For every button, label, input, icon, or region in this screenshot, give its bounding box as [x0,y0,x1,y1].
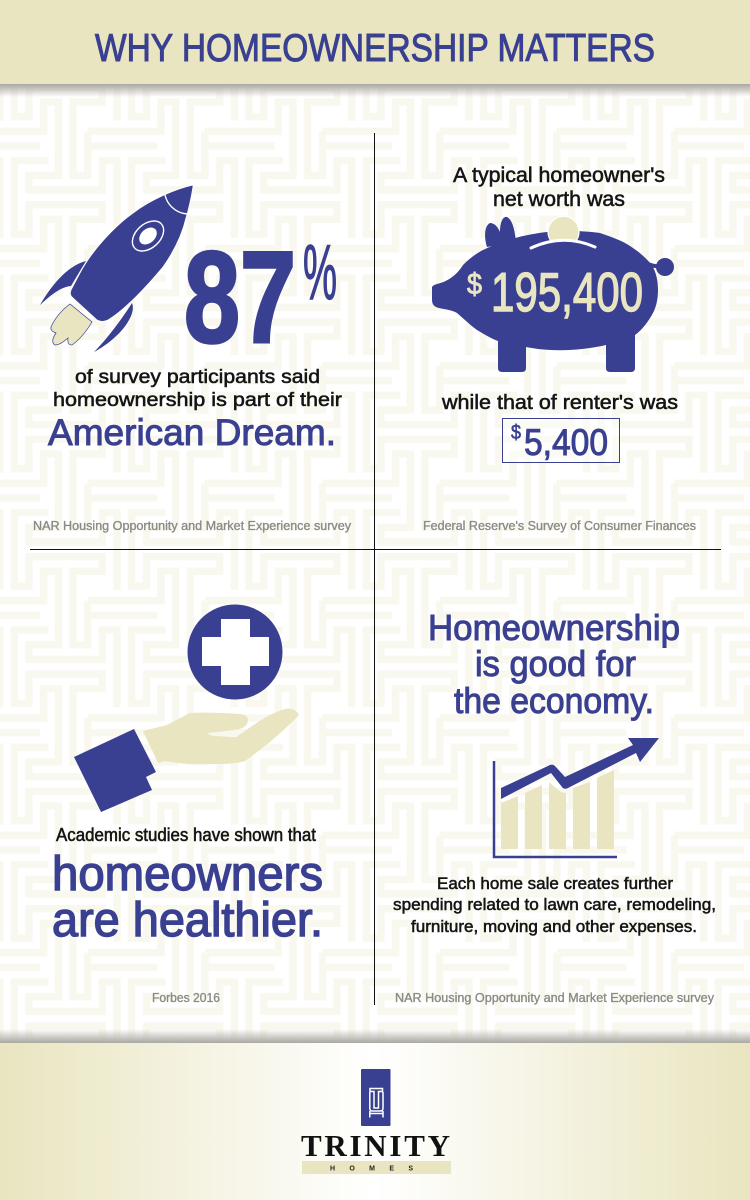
net worth intro: net worth was [493,188,625,211]
spending text: spending related to lawn care, remodeling, [393,895,716,914]
icon: medical cross above hand [74,604,299,812]
panel: healthier [52,604,323,1005]
healthier heading [52,848,323,947]
source: Forbes 2016 [152,991,220,1005]
net worth intro: A typical homeowner's [453,164,665,187]
economy heading: Homeownership [428,607,680,648]
panel: American Dream statistic [33,185,352,533]
economy heading: the economy. [454,680,654,721]
big number 87 percent: 87 [184,224,296,370]
chart: rising bars and arrow [494,738,659,857]
homeowner amount [467,261,643,323]
icon: piggy bank [432,216,674,372]
title: WHY HOMEOWNERSHIP MATTERS [95,27,655,70]
panel: economy [393,607,716,1005]
economy heading [428,607,680,721]
studies text: Academic studies have shown that [56,825,316,845]
icon: rocket [40,185,193,352]
economy heading: is good for [475,643,636,684]
source: NAR Housing Opportunity and Market Experience survey [395,991,715,1005]
renter amount box: $ [511,422,521,444]
renter text: while that of renter's was [441,392,678,414]
spending text [393,874,716,936]
survey text: homeownership is part of their [53,389,343,411]
survey text: of survey participants said [75,366,320,388]
logo: Trinity Homes [301,1069,451,1174]
footer band [0,1043,750,1200]
source: Federal Reserve's Survey of Consumer Finances [423,519,696,533]
logo: Trinity Homes: TRINITY [301,1128,450,1163]
logo: Trinity Homes: HOMES [330,1166,413,1172]
spending text: Each home sale creates further [437,874,673,893]
renter amount box: 5,400 [524,422,608,463]
spending text: furniture, moving and other expenses. [411,917,697,936]
survey text [53,366,343,411]
panel: net worth [423,164,696,533]
healthier heading: are healthier. [52,894,323,947]
American Dream heading: American Dream. [48,412,336,453]
panel: American Dream statistic: % [303,228,337,316]
source: NAR Housing Opportunity and Market Experience survey [33,519,352,533]
healthier heading: homeowners [52,848,323,901]
header banner [0,0,750,84]
homeowner amount: $ [467,268,482,301]
homeowner amount: 195,400 [491,261,643,323]
net worth intro [453,164,665,211]
